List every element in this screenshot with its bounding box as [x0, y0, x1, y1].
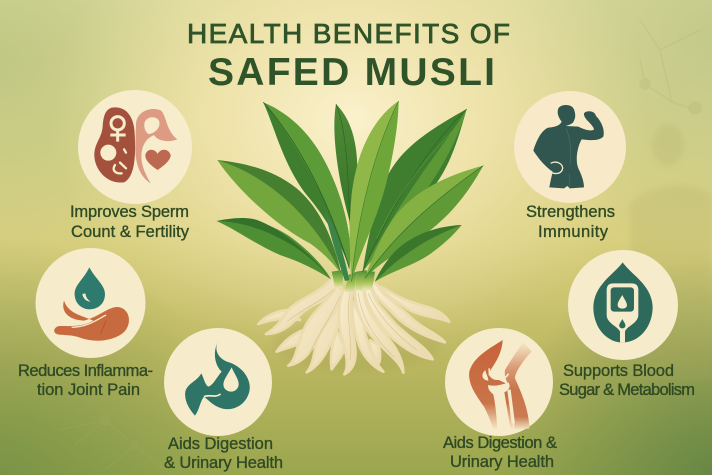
- icon: flexing man: [533, 105, 604, 188]
- stems: [332, 270, 375, 293]
- badge circle: [568, 250, 678, 360]
- leaf: lower right: [375, 225, 462, 282]
- label: Aids Digestion &: [443, 434, 557, 452]
- leaf: narrow centre back: [334, 104, 357, 228]
- badge circle: [164, 328, 272, 436]
- benefit: improves sperm count and fertility: [70, 90, 192, 241]
- icon: glucose meter drop: [593, 262, 653, 342]
- label: & Urinary Health: [164, 454, 283, 472]
- badge circle: [445, 328, 553, 436]
- icon: drop over hand: [54, 267, 129, 341]
- faint background human silhouette: [630, 124, 712, 380]
- leaf: lower left: [217, 218, 331, 279]
- roots: [258, 277, 449, 374]
- label: [164, 435, 283, 472]
- label: [559, 362, 695, 399]
- label: Immunity: [538, 223, 609, 241]
- label: [526, 203, 615, 241]
- title line 2: SAFED MUSLI: [208, 51, 495, 94]
- label: Reduces Inflamma-: [18, 362, 153, 380]
- benefit: aids digestion and urinary health, knee: [443, 328, 557, 471]
- label: Aids Digestion: [168, 435, 273, 453]
- benefit: supports blood sugar and metabolism: [559, 250, 695, 399]
- badge circle: [514, 91, 626, 203]
- badge circle: [78, 90, 192, 204]
- illustration: safed musli plant: [217, 101, 483, 374]
- label: Strengthens: [526, 203, 615, 221]
- badge circle: [36, 248, 146, 358]
- label: Improves Sperm: [70, 203, 189, 221]
- label: [18, 362, 153, 399]
- label: Urinary Health: [450, 453, 554, 471]
- leaf: small teal blade: [325, 212, 349, 281]
- label: [443, 434, 557, 471]
- label: tion Joint Pain: [37, 381, 140, 399]
- title: [187, 18, 510, 94]
- label: Count & Fertility: [71, 223, 190, 241]
- benefit: reduces inflammation and joint pain: [18, 248, 153, 399]
- leaf: middle left: [217, 160, 341, 273]
- title line 1: HEALTH BENEFITS OF: [187, 18, 510, 49]
- leaf: upper left: [263, 102, 350, 268]
- benefit: aids digestion and urinary health: [164, 328, 283, 472]
- leaf: middle right: [365, 166, 483, 278]
- leaves: [217, 101, 483, 282]
- leaf: centre front: [350, 101, 399, 282]
- leaf: upper right: [363, 109, 467, 272]
- label: Supports Blood: [563, 362, 674, 380]
- benefit: strengthens immunity: [514, 91, 626, 241]
- label: Sugar & Metabolism: [559, 381, 695, 399]
- label: [70, 203, 190, 241]
- icon: stomach: [185, 341, 250, 416]
- icon: reproductive organs: [94, 107, 177, 183]
- root creases: [287, 290, 417, 360]
- icon: knee joint: [469, 340, 532, 430]
